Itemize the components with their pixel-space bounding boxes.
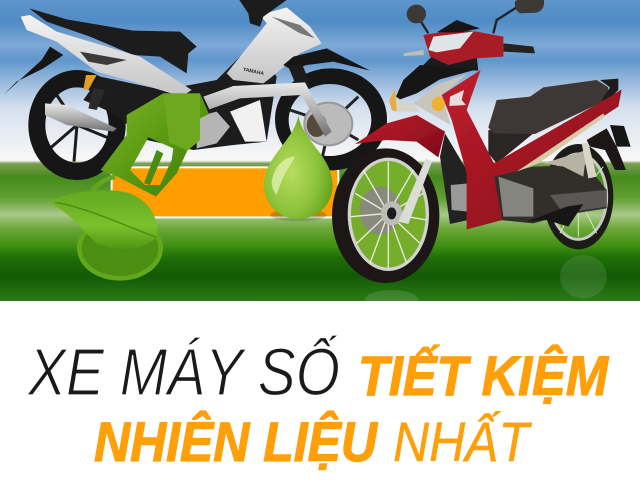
Honda front wheel	[332, 148, 439, 283]
Honda engine cover	[498, 177, 533, 217]
Yamaha body stripe	[80, 52, 127, 65]
Yamaha front fender	[283, 48, 370, 71]
Yamaha front wheel	[275, 68, 387, 170]
Honda headlight	[428, 32, 473, 52]
Honda ground reflections	[365, 255, 607, 310]
Honda body stripes	[517, 113, 605, 172]
orange banner	[112, 167, 338, 217]
Yamaha brake disc	[304, 103, 352, 145]
Honda swingarm	[550, 190, 607, 213]
Yamaha rear body panel	[21, 15, 192, 97]
Yamaha front handlebar	[239, 0, 287, 27]
Honda rear wheel	[543, 144, 613, 249]
Yamaha exhaust	[45, 103, 117, 132]
nozzle side facet	[163, 93, 200, 151]
Honda wing logo	[449, 90, 466, 106]
Yamaha white side panel	[230, 100, 267, 142]
Honda inner frame	[440, 133, 468, 224]
title line 2 orange bold: NHIÊN LIỆU	[94, 410, 378, 473]
Honda handlebar grip	[503, 43, 535, 53]
ring	[79, 218, 161, 278]
background: sky and grass	[0, 0, 640, 301]
Honda mirrors	[407, 0, 544, 33]
Yamaha rear shock	[83, 75, 97, 90]
drop shadow	[270, 209, 327, 221]
Yamaha logo: YAMAHA	[242, 67, 265, 77]
leaf blade	[48, 190, 157, 249]
Yamaha engine cover	[197, 112, 230, 148]
Honda front silver panel	[413, 74, 467, 125]
Yamaha headlight strip	[272, 17, 315, 38]
drop body	[264, 115, 333, 219]
Honda mid engine	[451, 183, 468, 212]
Honda rear shock	[582, 143, 597, 178]
motorcycle: Honda red	[332, 0, 631, 310]
Honda under-seat	[488, 130, 533, 163]
leaf shadow	[78, 225, 162, 282]
Honda red main body	[442, 70, 622, 229]
Honda grab rail	[600, 79, 618, 102]
green nozzle body	[101, 93, 209, 197]
Honda seat	[488, 80, 608, 134]
Honda front black cowl	[396, 65, 477, 99]
Yamaha rear wheel	[28, 70, 126, 180]
Yamaha engine and frame	[83, 43, 277, 150]
Yamaha front fairing	[227, 7, 322, 83]
Honda engine and underbody	[493, 165, 607, 223]
Honda indicators	[389, 88, 397, 112]
Honda fork	[398, 158, 432, 224]
fuel drop	[264, 115, 333, 221]
title line 1 black: XE MÁY SỐ	[26, 335, 340, 410]
Honda rear fender and plate	[587, 128, 626, 170]
leaf vein	[55, 202, 157, 237]
drop highlight	[272, 157, 295, 195]
Honda rear frame panel	[543, 150, 587, 177]
chrome hose	[203, 82, 332, 137]
Honda black top	[437, 20, 480, 32]
Yamaha seat	[29, 8, 197, 73]
title line 2 orange regular: NHẤT	[393, 410, 532, 473]
title line 1 orange: TIẾT KIỆM	[358, 344, 609, 407]
leaf stem curve	[92, 177, 115, 192]
Honda steering neck	[420, 55, 478, 71]
leaf with ring	[48, 177, 162, 282]
Honda footrest stand	[527, 204, 583, 227]
white title band	[0, 301, 640, 480]
Yamaha fork	[288, 63, 312, 95]
fuel nozzle with hose	[101, 82, 332, 197]
Honda front fender	[355, 115, 445, 157]
motorcycle: Yamaha black and white	[3, 0, 387, 180]
Honda white lower cowl	[396, 100, 420, 112]
nozzle trigger	[144, 150, 163, 185]
Honda headlight cowl	[423, 30, 503, 65]
Yamaha rear mudguard	[3, 47, 63, 95]
